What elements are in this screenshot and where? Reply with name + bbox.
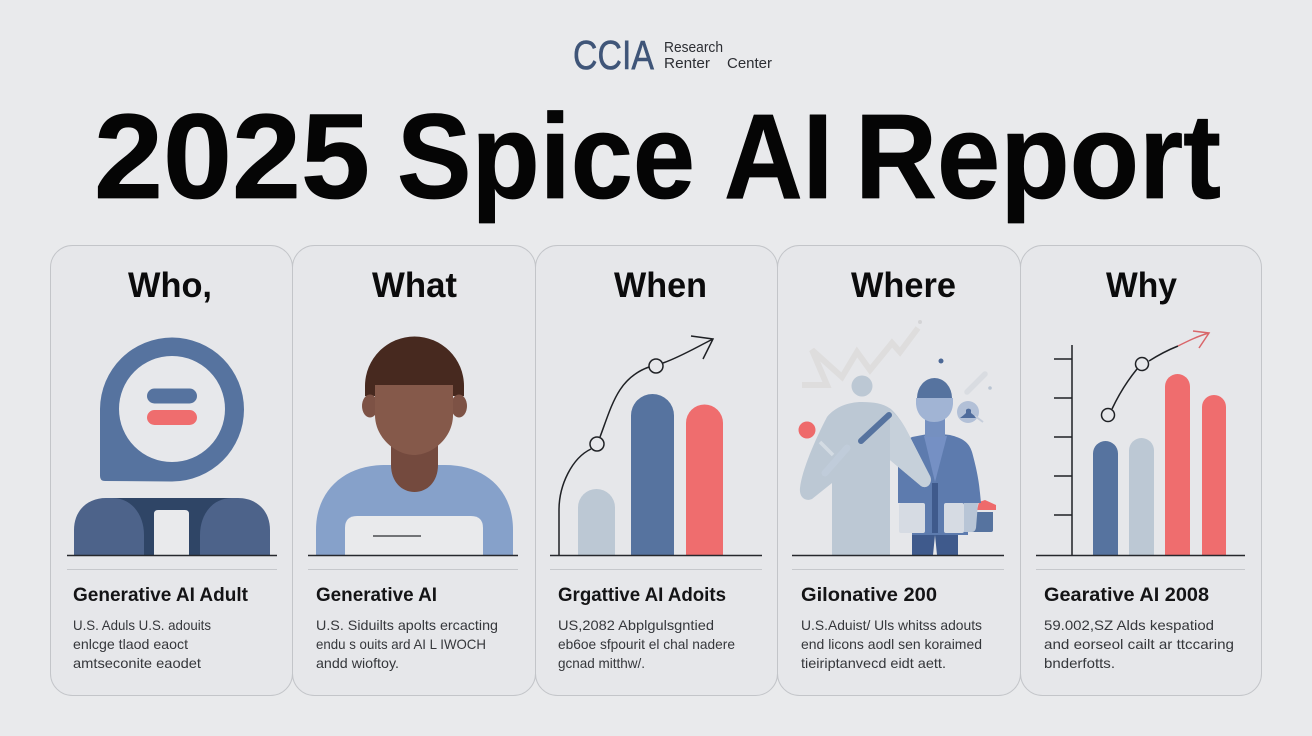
- body text: who: enlcge tlaod eaoct: [73, 636, 188, 652]
- panel: where: [778, 246, 1020, 696]
- panel: why: [1020, 246, 1262, 696]
- icon: speech pin over shoulders: [74, 338, 270, 555]
- chart: bars with rising arrow: [559, 336, 723, 555]
- panel: when: [536, 246, 778, 696]
- body text: when: US,2082 Abplgulsgntied: [558, 617, 714, 633]
- logo: CCIA Research Center: [573, 32, 772, 78]
- body text: where: end licons aodl sen koraimed: [801, 636, 982, 652]
- heading: where: Where: [851, 266, 956, 305]
- logo: CCIA Research Center: Research: [664, 40, 723, 56]
- panel: who: [50, 246, 292, 696]
- body text: who: amtseconite eaodet: [73, 655, 201, 671]
- body text: where: tieiriptanvecd eidt aett.: [801, 655, 946, 671]
- illustration: two figures: [798, 320, 996, 555]
- body text: who: [73, 617, 211, 671]
- logo: CCIA Research Center: Center: [727, 56, 772, 72]
- body text: who: U.S. Aduls U.S. adouits: [73, 617, 211, 633]
- body text: what: endu s ouits ard AI L IWOCH: [316, 636, 486, 652]
- body text: where: U.S.Aduist/ Uls whitss adouts: [801, 617, 982, 633]
- heading: why: Why: [1106, 266, 1178, 305]
- title: Report: [855, 88, 1221, 224]
- subheading: when: Grgattive AI Adoits: [558, 585, 726, 606]
- logo: CCIA Research Center: Renter: [664, 56, 710, 72]
- title: AI: [724, 88, 833, 224]
- panel: what: [292, 246, 536, 696]
- title: 2025: [94, 88, 370, 224]
- heading: what: What: [372, 266, 457, 305]
- body text: when: gcnad mitthw/.: [558, 655, 645, 671]
- subheading: who: Generative AI Adult: [73, 585, 249, 606]
- title: Spice: [397, 88, 695, 224]
- body text: what: [316, 617, 498, 671]
- body text: why: bnderfotts.: [1044, 655, 1115, 671]
- heading: who: Who,: [128, 266, 212, 305]
- body text: when: [558, 617, 735, 671]
- body text: why: 59.002,SZ Alds kespatiod: [1044, 617, 1214, 633]
- heading: when: When: [614, 266, 707, 305]
- subheading: where: Gilonative 200: [801, 585, 937, 606]
- logo: CCIA Research Center: CCIA: [573, 32, 655, 78]
- subheading: what: Generative AI: [316, 585, 437, 606]
- subheading: why: Gearative AI 2008: [1044, 585, 1209, 606]
- body text: when: eb6oe sfpourit el chal nadere: [558, 636, 735, 652]
- body text: why: and eorseol cailt ar ttccaring: [1044, 636, 1234, 652]
- title: [94, 88, 1221, 224]
- icon: person at laptop: [316, 336, 513, 555]
- body text: what: U.S. Siduilts apolts ercacting: [316, 617, 498, 633]
- body text: what: andd wioftoy.: [316, 655, 399, 671]
- chart: axis, bars and rising arrow: [1054, 331, 1226, 555]
- body text: where: [801, 617, 982, 671]
- body text: why: [1044, 617, 1234, 671]
